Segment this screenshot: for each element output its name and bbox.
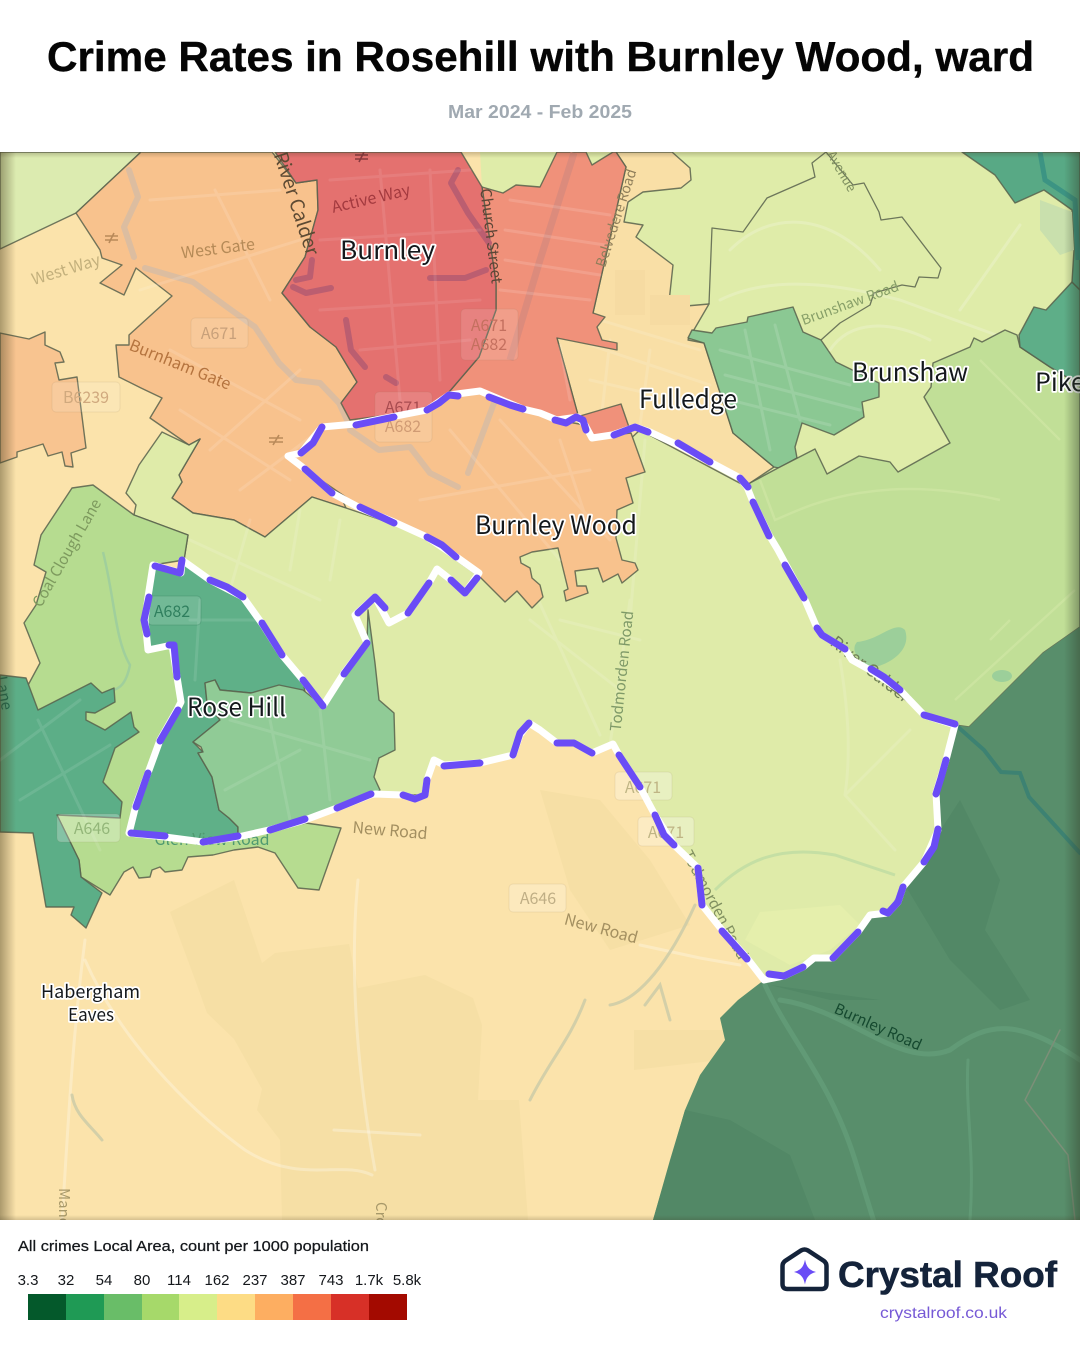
park lighter patch [745, 905, 860, 965]
region: Rose Hill medium green [193, 610, 395, 837]
road names: Brunshaw Road [798, 276, 902, 330]
region: Church Street salmon [449, 152, 626, 420]
legend scale labels: 743 [318, 1272, 344, 1289]
road names: West Gate [180, 231, 256, 263]
top-right reservoir [1040, 200, 1074, 255]
stream in the park [715, 852, 895, 890]
legend [18, 1238, 422, 1320]
region: small salmon square [581, 403, 630, 434]
east medium lake and paths [760, 360, 1075, 700]
map edge vignette [0, 152, 1080, 1220]
road shields: B6239 [63, 384, 109, 408]
stream in western green [103, 552, 130, 692]
region: Rose Hill dark green [129, 560, 305, 842]
road names: River Calder [268, 148, 327, 259]
Fulledge darker blocks [668, 295, 690, 307]
river through Burnham [121, 167, 350, 422]
road shields: A671 [648, 819, 684, 843]
place labels [41, 231, 1080, 1027]
south streams [72, 905, 695, 1140]
Burnham streets [140, 190, 320, 490]
Burnley Wood streets [420, 420, 610, 560]
place labels: Fulledge [639, 380, 737, 416]
far-west streets [0, 700, 110, 850]
Brunshaw west streets [720, 325, 860, 450]
legend scale labels: 80 [134, 1272, 150, 1289]
railway through salmon area [510, 153, 574, 360]
salmon streets [500, 200, 610, 400]
title: Crime Rates in Rosehill with Burnley Wood, ward [47, 33, 1034, 80]
road names: Manchester [54, 1188, 75, 1269]
south roads [62, 880, 740, 1220]
road shields: A671 [625, 774, 661, 798]
legend scale labels: 3.3 [18, 1272, 38, 1289]
legend scale labels: 114 [167, 1272, 191, 1289]
central streets and paths [190, 440, 910, 850]
south-east roads and river [765, 727, 1080, 1225]
subtitle: date range: Mar 2024 - Feb 2025 [448, 102, 632, 122]
website url: crystalroof.co.uk [880, 1305, 1008, 1322]
region: Brunshaw west green [688, 307, 879, 468]
road names [0, 147, 925, 1269]
road names: River Calder [826, 629, 917, 708]
Rose Hill streets [190, 600, 370, 820]
top-right river [1040, 152, 1078, 260]
legend scale labels: 1.7k [355, 1272, 384, 1289]
region: north-east light green [480, 152, 1074, 482]
road shields: A671 [385, 394, 421, 418]
legend scale labels: 32 [58, 1272, 74, 1289]
place labels: Habergham [41, 978, 140, 1004]
icon: house with star [782, 1250, 826, 1289]
region: east medium green [747, 330, 1080, 727]
road shields: A671 [471, 312, 507, 336]
place labels: Burnley Wood [475, 506, 637, 542]
road names: Crown [371, 1202, 392, 1247]
road names: Burnley Road [831, 998, 925, 1055]
road shields: A646 [74, 815, 110, 839]
road names: Burnham Gate [126, 332, 235, 395]
place labels: Burnley [340, 231, 435, 267]
logo wordmark: Crystal Roof [838, 1254, 1058, 1295]
region: central light green [126, 430, 955, 980]
road names: Belvedere Road [591, 166, 641, 270]
canal segments in Burnley [293, 170, 489, 383]
road names: New Road [562, 906, 641, 948]
legend scale labels: 162 [204, 1272, 230, 1289]
region: western medium green [20, 485, 341, 895]
road shields: A646 [520, 885, 556, 909]
legend scale labels: 5.8k [393, 1272, 422, 1289]
road names: Glen View Road [154, 826, 270, 850]
place labels: Brunshaw [852, 353, 968, 389]
legend colour bar [28, 1294, 407, 1320]
road names: Church Street [475, 187, 508, 285]
terrain patches in the south [170, 790, 730, 1220]
road names: Todmorden Road [678, 846, 753, 963]
place labels: Eaves [68, 1001, 114, 1027]
Fulledge streets [590, 320, 720, 430]
legend scale labels [18, 1272, 422, 1289]
road shields: A682 [154, 598, 190, 622]
road names: Todmorden Road [605, 610, 638, 732]
region: far-west dark green [0, 675, 139, 928]
region: top-right green [962, 152, 1080, 290]
legend scale labels: 237 [242, 1272, 268, 1289]
ward boundary outlines north-east [709, 152, 941, 340]
region: Burnham orange [76, 152, 357, 537]
region: Pike green [1019, 282, 1080, 385]
road names: Avenue [823, 147, 862, 195]
region: Fulledge peach [557, 152, 774, 487]
road shields: A682 [471, 331, 507, 355]
place labels: Rose Hill [187, 688, 286, 724]
river and railway through Burnley Wood [347, 402, 497, 490]
road names: New Road [352, 814, 429, 844]
road shields: A682 [385, 413, 421, 437]
road shields: A671 [201, 320, 237, 344]
south-east darker woodland [653, 800, 1030, 1220]
Burnley streets [320, 170, 480, 400]
region: west peach-orange patch [0, 332, 86, 467]
region: top-left corner green [0, 152, 141, 249]
north-east streets [720, 222, 1020, 350]
road names: West Way [28, 246, 103, 290]
legend scale labels: 387 [280, 1272, 306, 1289]
region: Burnley town centre red [275, 152, 496, 420]
region: low-rate peach base [0, 152, 900, 1220]
road names: Active Way [329, 176, 413, 218]
road shields [52, 309, 694, 912]
ward boundary: purple dashes [131, 395, 955, 976]
legend scale labels: 54 [96, 1272, 112, 1289]
region: Burnley Wood orange [288, 391, 645, 608]
region: south-east dark green [653, 627, 1080, 1220]
legend title: All crimes Local Area, count per 1000 population [18, 1238, 369, 1255]
road names: Coal Clough Lane [27, 495, 106, 611]
logo: Crystal Roof [782, 1250, 1058, 1322]
ward boundary: white line [129, 391, 955, 980]
rail station symbols [105, 152, 368, 445]
